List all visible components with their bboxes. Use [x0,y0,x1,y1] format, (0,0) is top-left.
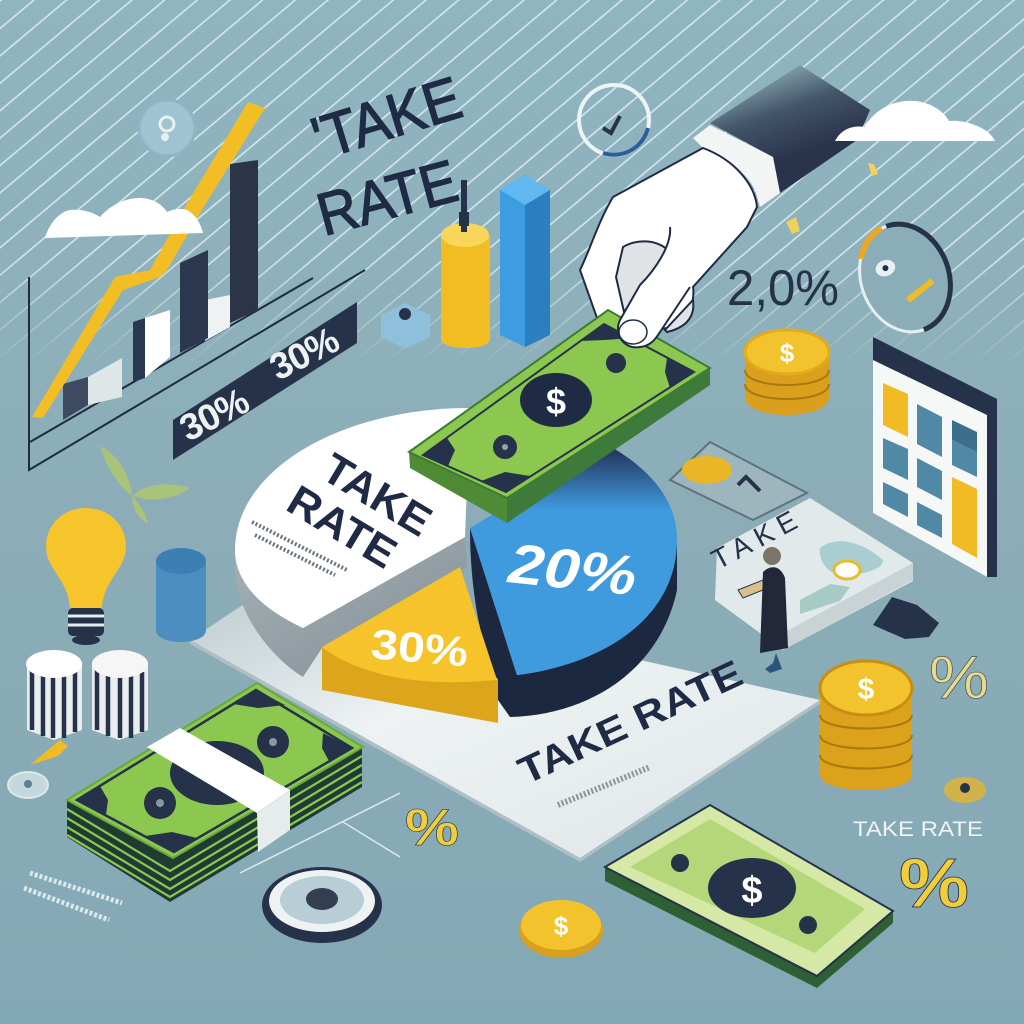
calculator [873,337,997,577]
cloud: left [45,198,203,238]
blue box column [500,175,550,347]
pie: white slice [235,408,470,677]
coin stack: lower [820,661,912,790]
coin stack: upper: $ [780,338,795,368]
small blue cube [381,303,430,349]
icon: small coin left [8,772,48,798]
money stack [67,683,363,902]
pie: blue slice: 20% [505,531,640,607]
icon: top clock [579,85,649,155]
pie: white slice: TAKE [314,444,440,546]
icon: top-left clock [139,100,195,156]
money on pie [409,310,710,523]
blue cylinder [156,548,206,642]
percent: right: % [929,644,989,711]
bill: lower right [605,805,893,988]
pie: white slice: RATE [279,476,405,578]
confetti [786,163,878,234]
yellow cylinder [441,180,490,348]
cuff [693,125,780,207]
gold coin: $ [554,911,569,941]
cloud: right [835,101,995,141]
take rate text on paper: TAKE RATE [512,653,749,793]
icon: light bulb [46,508,126,645]
coin stack: lower: $ [858,673,875,706]
small isometric tray [670,442,807,520]
bar 4 [230,160,258,323]
paper base [190,580,820,858]
right document [706,498,913,650]
percentage 2,0%: 2,0% [727,260,839,316]
coin stack: upper [745,330,829,415]
disc [262,867,382,943]
bar 3 [180,250,230,353]
percent banner [173,302,357,460]
pie: yellow slice [322,567,498,723]
pie: yellow slice: 30% [369,620,470,675]
line marker [240,793,400,873]
label: take rate right: TAKE RATE [853,818,983,841]
right document: TAKE [706,505,802,575]
icon: small coin right [944,777,986,803]
striped cylinders [26,650,148,740]
pie: blue slice [470,448,677,717]
percent: lower right: % [899,844,969,922]
gold coin [519,900,603,958]
sleeve [710,65,870,193]
percent: centre: % [405,799,459,857]
yellow arrow small [30,740,68,765]
percent banner: 30% [173,380,255,449]
line chart with bars [29,102,365,470]
title: take rate: 'TAKE [304,64,469,172]
small caption left [24,873,122,920]
small black object [873,597,939,639]
percent banner: 30% [263,319,345,388]
lens icon [845,211,965,345]
bar 2 [133,310,170,382]
paper base edge [190,640,820,862]
money on pie: $ [546,381,566,422]
hand [580,148,757,335]
bar 1 [63,358,122,420]
bill: lower right: $ [741,870,763,912]
finger over money [618,227,693,347]
person [738,547,788,673]
title: take rate [304,64,469,249]
icon: leaf [100,446,190,524]
title: take rate: RATE [310,147,465,249]
yellow trend arrow [32,102,265,418]
